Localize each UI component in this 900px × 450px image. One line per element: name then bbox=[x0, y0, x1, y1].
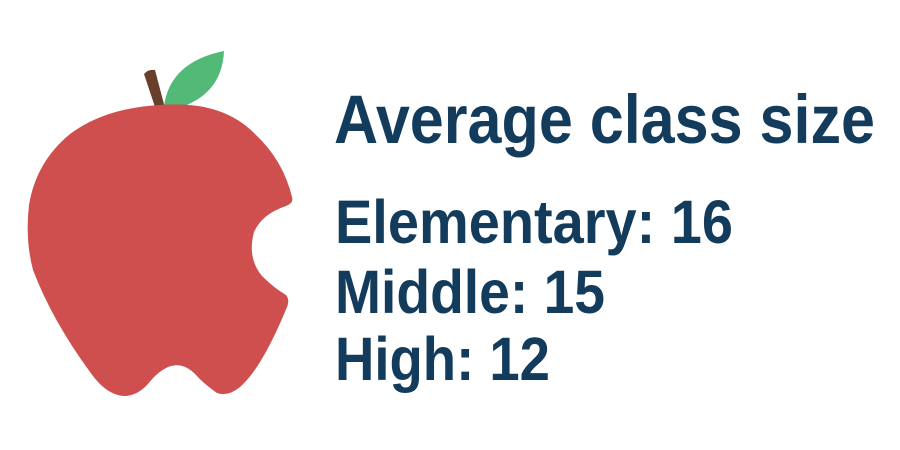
apple stem bbox=[144, 70, 165, 110]
icon: apple bbox=[28, 51, 292, 396]
apple leaf bbox=[164, 51, 224, 109]
apple body bbox=[28, 104, 292, 396]
stats text block bbox=[335, 188, 733, 393]
elementary stat: Elementary: 16 bbox=[335, 188, 733, 256]
high stat: High: 12 bbox=[335, 325, 550, 393]
middle stat: Middle: 15 bbox=[335, 258, 605, 326]
